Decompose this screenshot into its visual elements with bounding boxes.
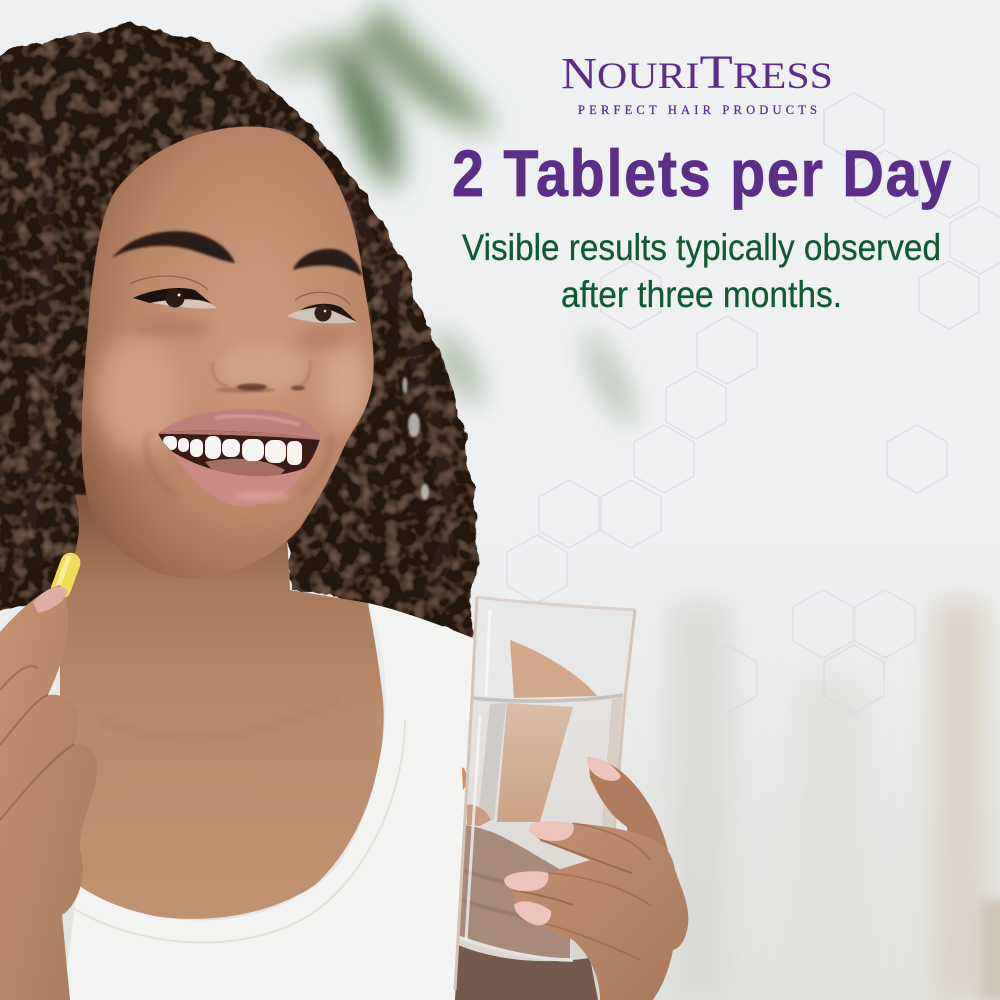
woman: neck and chest [60, 495, 384, 919]
logo: NOURI TRESS [561, 46, 833, 99]
eyes [130, 276, 357, 323]
refracted hand [458, 825, 570, 960]
woman: face [70, 127, 374, 595]
woman: white tank top [62, 603, 478, 1000]
subtitle: Visible results typically observed [462, 227, 941, 268]
glass bottom [455, 945, 598, 1000]
fingernails [504, 757, 621, 925]
index finger [588, 757, 668, 875]
upper empty part [472, 597, 635, 700]
back of hand [505, 823, 688, 1000]
water [455, 696, 623, 1000]
logo: PERFECT HAIR PRODUCTS [578, 103, 817, 117]
blurred plant [262, 0, 635, 430]
water glass [455, 597, 635, 1000]
woman: curly hair [0, 25, 476, 638]
teeth [163, 436, 302, 465]
gaps in curls [402, 377, 429, 500]
subtitle [462, 227, 941, 315]
capsule [48, 550, 83, 602]
subtitle: after three months. [561, 274, 842, 315]
mouth opening [158, 430, 320, 476]
left hand holding capsule [0, 585, 97, 1000]
nose [212, 344, 310, 393]
right hand holding glass [504, 757, 688, 1000]
eyebrows [112, 231, 362, 276]
collarbone shading [100, 700, 340, 739]
smile [150, 410, 330, 507]
lips [158, 410, 322, 507]
honeycomb hexagons [507, 93, 1000, 713]
